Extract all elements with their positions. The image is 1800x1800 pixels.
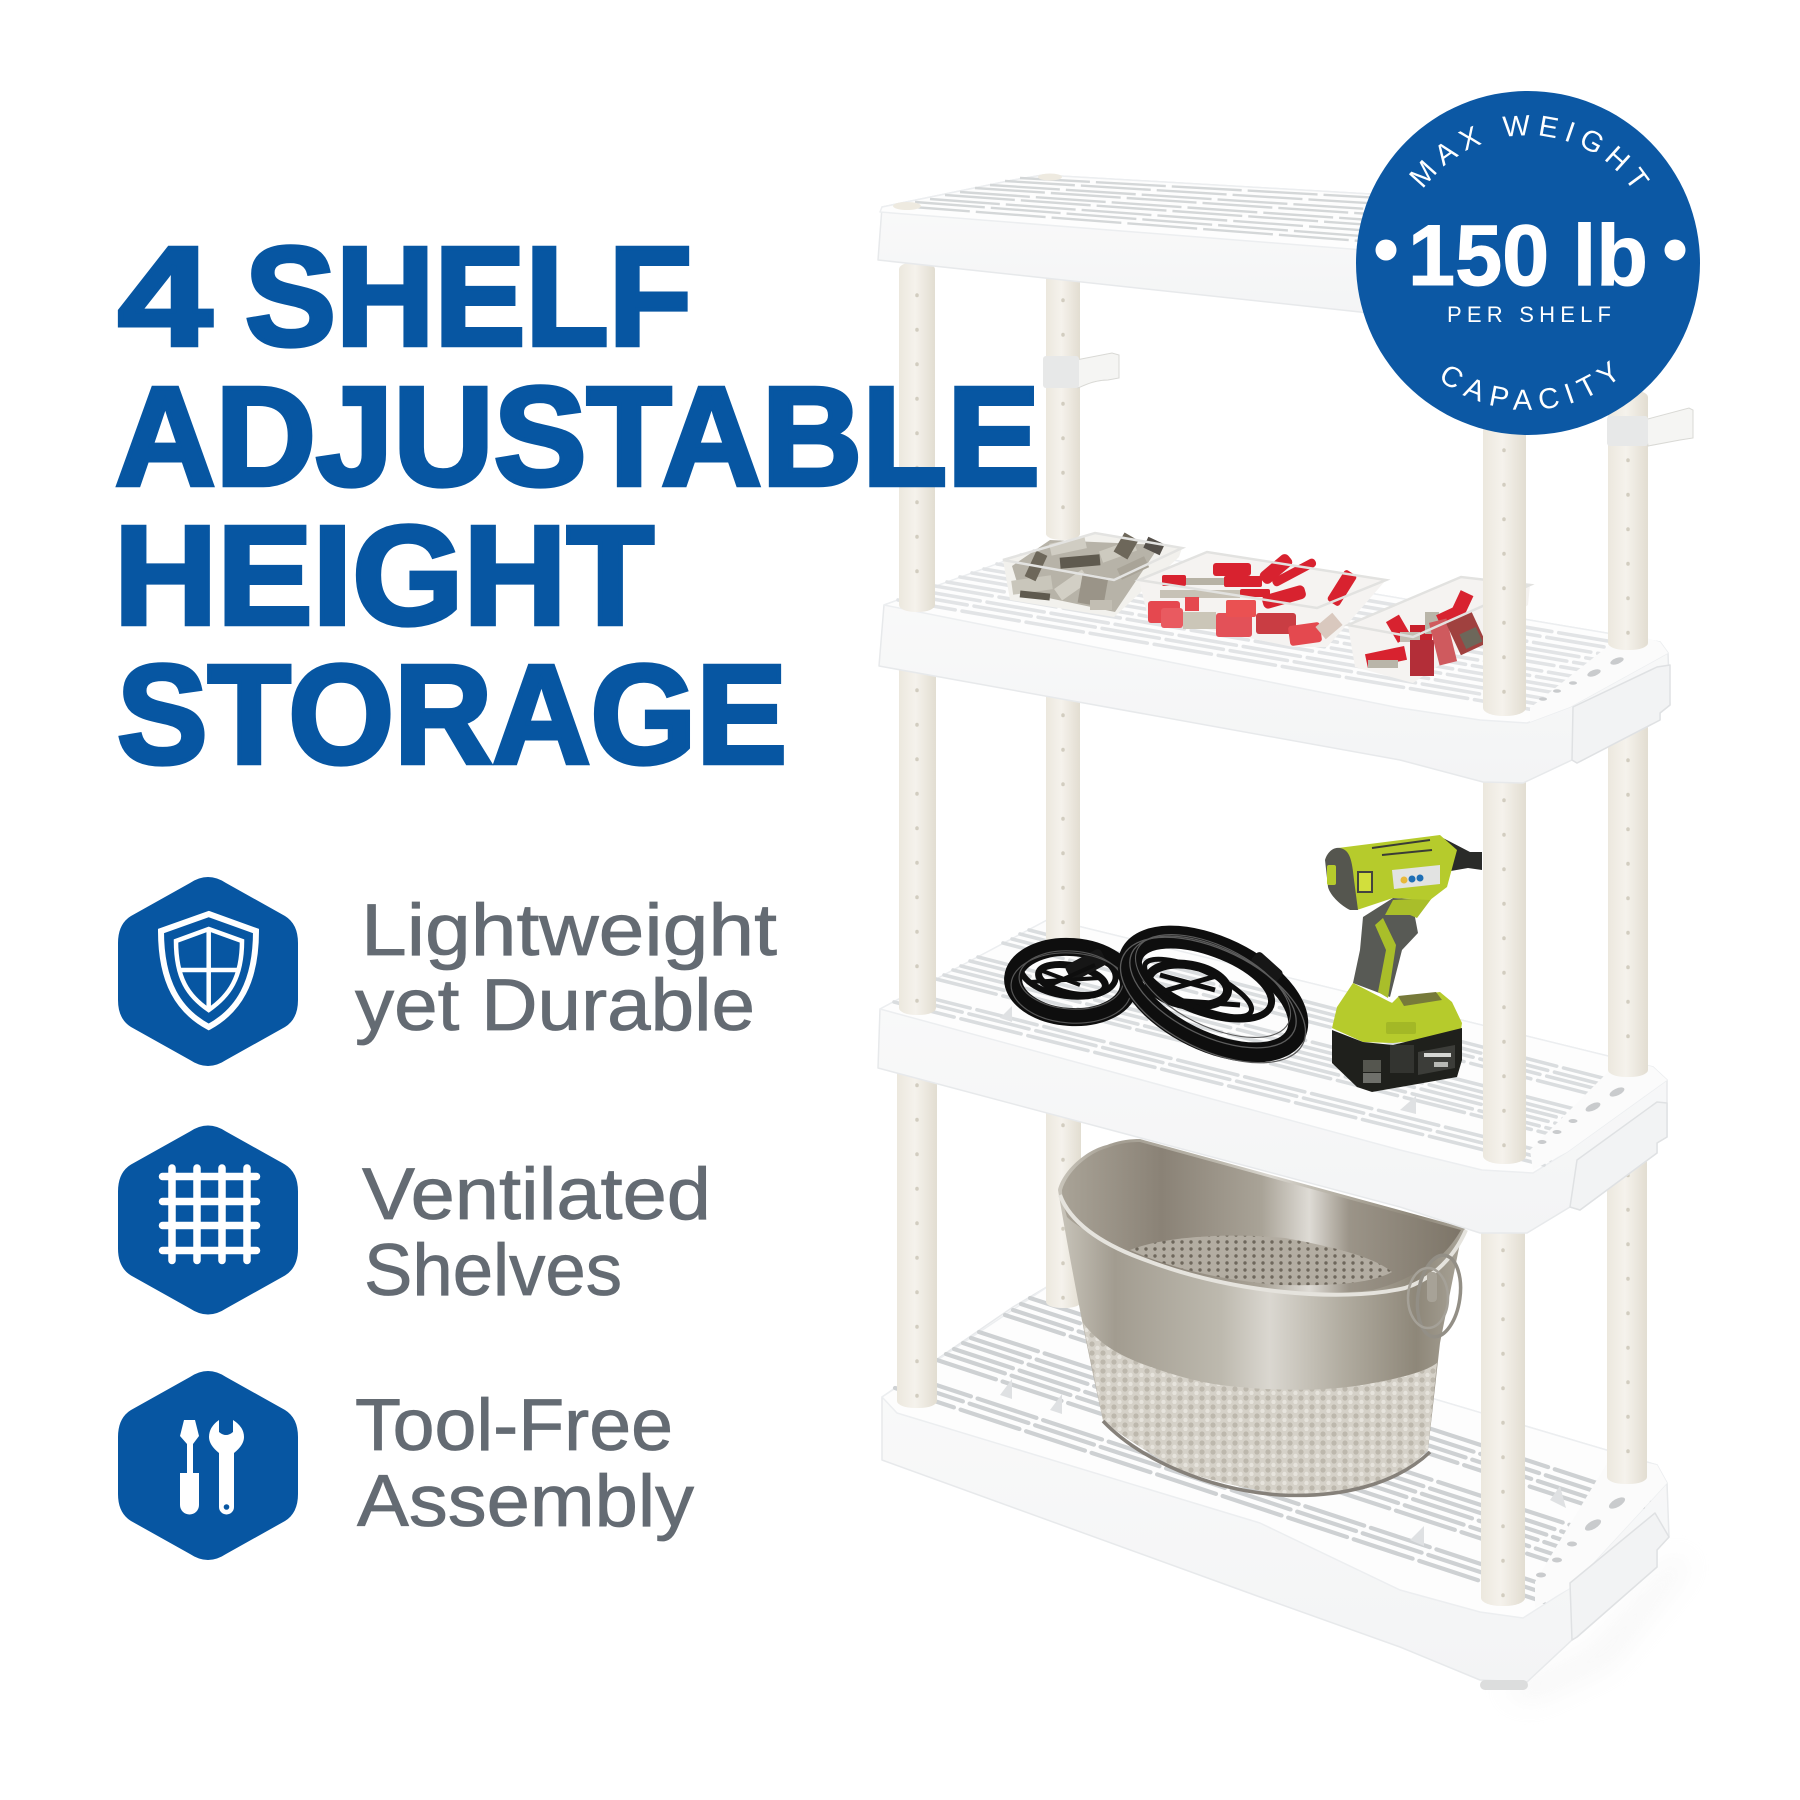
feature: lightweight yet durable — [118, 877, 777, 1066]
text — [355, 890, 777, 1046]
cordless impact driver and battery — [1325, 835, 1482, 1092]
bottom shelf — [882, 1285, 1669, 1690]
text: Ventilated — [362, 1154, 711, 1235]
badge: max weight capacity — [1356, 91, 1700, 435]
second shelf — [879, 541, 1670, 783]
icon: screwdriver and wrench — [118, 1371, 298, 1560]
text — [362, 1154, 711, 1311]
text: Assembly — [357, 1461, 695, 1542]
small brackets on back posts — [1043, 353, 1693, 446]
badge: max weight capacity: MAX WEIGHT — [1409, 115, 1650, 188]
text: yet Durable — [355, 965, 755, 1046]
floor shadow — [1500, 1555, 1690, 1702]
stainless steel tub — [1058, 1139, 1466, 1495]
feature: ventilated shelves — [118, 1126, 711, 1314]
feature: tool-free assembly — [118, 1371, 695, 1560]
posts: middle back — [1046, 680, 1648, 1077]
posts: lower section — [897, 1050, 1647, 1606]
heading: 4 — [118, 217, 212, 375]
text: Lightweight — [361, 890, 777, 971]
heading — [114, 217, 1040, 793]
icon: grid — [118, 1126, 298, 1314]
clear tray with small red clips — [1348, 577, 1530, 683]
badge: max weight capacity: PER SHELF — [1447, 302, 1611, 327]
heading: HEIGHT — [114, 496, 654, 654]
product photo: shelving unit — [878, 174, 1693, 1702]
badge: max weight capacity: CAPACITY — [1442, 360, 1616, 410]
posts: upper back — [1046, 270, 1648, 650]
clear tray with silver clips — [1003, 532, 1182, 617]
text — [355, 1385, 695, 1542]
heading: SHELF — [245, 217, 692, 375]
badge: max weight capacity: 150 lb — [1408, 208, 1648, 304]
posts: middle front — [899, 655, 1526, 1164]
posts: upper front — [899, 262, 1526, 716]
text: Shelves — [364, 1230, 622, 1311]
black extension cables — [1009, 911, 1325, 1089]
heading: ADJUSTABLE — [115, 357, 1040, 515]
third shelf — [878, 919, 1667, 1233]
icon: shield — [118, 877, 298, 1066]
clear tray with red clips — [1139, 552, 1386, 647]
text: Tool-Free — [355, 1385, 673, 1466]
heading: STORAGE — [117, 635, 787, 793]
top shelf — [878, 174, 1440, 320]
